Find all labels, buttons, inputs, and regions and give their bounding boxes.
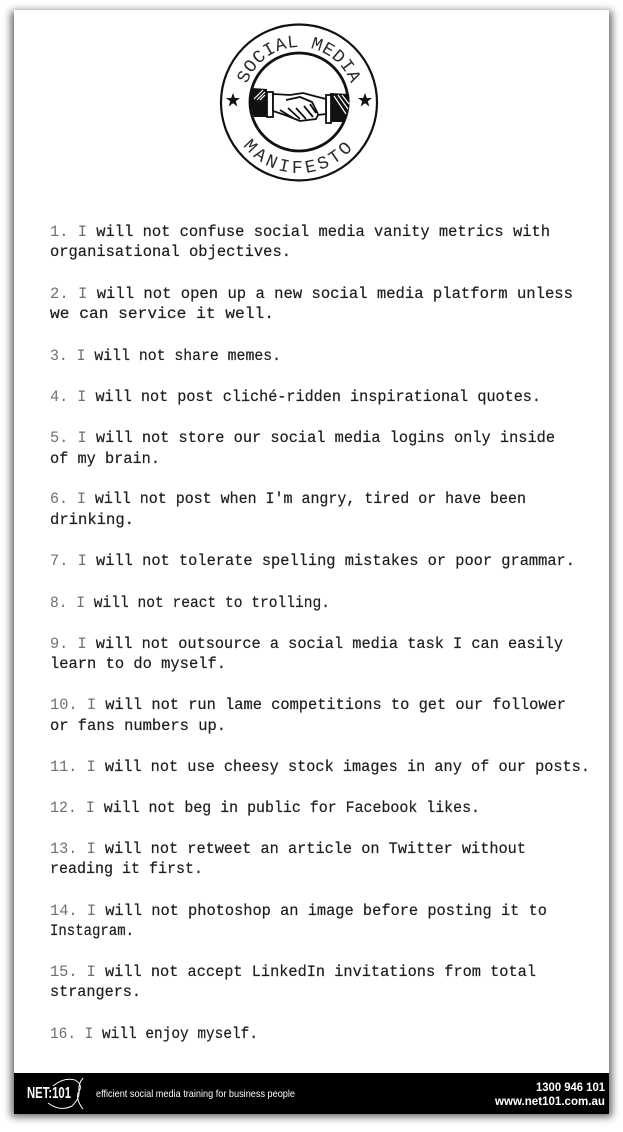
footer logo: NET:101: NET:101	[27, 1085, 71, 1102]
text block: manifesto list: strangers.	[50, 983, 141, 1001]
text block: manifesto list: 14. I will not photoshop an image before posting it to	[50, 902, 547, 920]
icon: left star	[226, 93, 240, 106]
text block: manifesto list: 12. I will not beg in public for Facebook likes.	[50, 799, 480, 817]
text block: manifesto list: organisational objectives.	[50, 243, 291, 261]
text block: manifesto list: 10. I will not run lame competitions to get our follower	[50, 696, 566, 714]
text block: manifesto list: 2. I will not open up a new social media platform unless	[50, 285, 573, 303]
seal text: social media: SOCIAL MEDIA	[238, 36, 360, 84]
text block: manifesto list: 16. I will enjoy myself.	[50, 1025, 258, 1043]
text block: manifesto list: 7. I will not tolerate spelling mistakes or poor grammar.	[50, 552, 575, 570]
footer phone: 1300 946 101	[536, 1080, 605, 1094]
text block: manifesto list: or fans numbers up.	[50, 717, 226, 735]
text block: manifesto list: 1. I will not confuse social media vanity metrics with	[50, 223, 550, 241]
footer logo: NET:101	[27, 1078, 83, 1109]
footer website: www.net101.com.au	[494, 1094, 605, 1108]
icon: handshake	[251, 88, 350, 123]
seal text: manifesto: MANIFESTO	[244, 138, 350, 173]
footer tagline: efficient social media training for business people	[96, 1088, 295, 1100]
text block: manifesto list: 11. I will not use cheesy stock images in any of our posts.	[50, 758, 590, 776]
text block: manifesto list: reading it first.	[50, 860, 203, 878]
text block: manifesto list: of my brain.	[50, 450, 160, 468]
icon: right star	[358, 93, 372, 106]
text block: manifesto list: 4. I will not post cliché-ridden inspirational quotes.	[50, 388, 541, 406]
text block: manifesto list: 8. I will not react to trolling.	[50, 594, 330, 612]
text block: manifesto list: 5. I will not store our social media logins only inside	[50, 429, 555, 447]
text block: manifesto list: 9. I will not outsource a social media task I can easily	[50, 635, 563, 653]
footer bar	[14, 1073, 609, 1114]
text block: manifesto list: we can service it well.	[50, 305, 274, 323]
text block: manifesto list	[50, 223, 590, 1043]
text block: manifesto list: learn to do myself.	[50, 655, 226, 673]
text block: manifesto list: drinking.	[50, 511, 134, 529]
text block: manifesto list: 6. I will not post when I'm angry, tired or have been	[50, 490, 526, 508]
text block: manifesto list: Instagram.	[50, 922, 134, 940]
text block: manifesto list: 3. I will not share memes.	[50, 347, 281, 365]
text block: manifesto list: 13. I will not retweet an article on Twitter without	[50, 840, 526, 858]
icon: social media manifesto seal	[220, 23, 378, 182]
text block: manifesto list: 15. I will not accept LinkedIn invitations from total	[50, 963, 536, 981]
